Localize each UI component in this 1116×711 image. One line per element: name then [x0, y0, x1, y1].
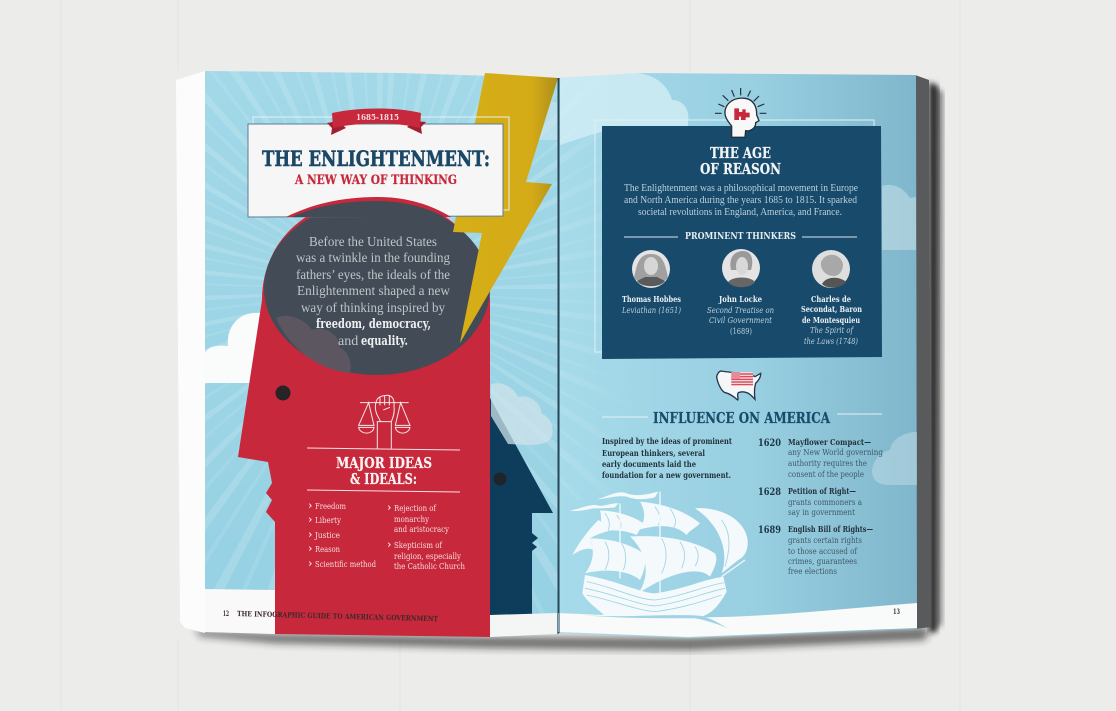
- title card: [248, 124, 503, 217]
- list column one: Justice: [314, 531, 340, 541]
- icon: fist and scales: [359, 395, 410, 449]
- intro paragraph: [296, 235, 451, 349]
- timeline 1620: any New World governing: [788, 447, 884, 457]
- influence intro text: [602, 436, 732, 480]
- thinker: Locke: (1689): [730, 327, 752, 336]
- major ideas heading: MAJOR IDEAS: [336, 455, 432, 472]
- thinker: Hobbes: [621, 294, 681, 315]
- intro paragraph: Enlightenment shaped a new: [297, 284, 451, 299]
- intro paragraph: and: [338, 334, 358, 349]
- timeline 1689: crimes, guarantees: [788, 556, 857, 566]
- thinker: Montesquieu: de Montesquieu: [802, 315, 860, 325]
- lightning bolt: [453, 73, 558, 343]
- portrait: Hobbes: [632, 250, 670, 288]
- panel paragraph: and North America during the years 1685 to 1815. It sparked: [624, 195, 857, 206]
- list column two: ›: [387, 501, 391, 514]
- sunburst rays on right page: [560, 150, 570, 464]
- list column two: Rejection of: [394, 504, 437, 514]
- intro paragraph: fathers’ eyes, the ideals of the: [296, 268, 450, 283]
- title text: THE ENLIGHTENMENT:: [262, 146, 490, 171]
- timeline 1689: grants certain rights: [788, 535, 862, 545]
- shadow head eye: [494, 472, 506, 486]
- white bottom wave: [558, 603, 917, 637]
- timeline 1620: 1620: [758, 438, 781, 449]
- icon: US map with flag: [717, 371, 761, 400]
- list column one: ›: [308, 513, 312, 526]
- thinker: Hobbes: Leviathan (1651): [621, 306, 681, 315]
- subtitle text: A NEW WAY OF THINKING: [294, 173, 457, 188]
- list column one: ›: [308, 557, 312, 570]
- timeline 1628: say in government: [788, 507, 856, 517]
- timeline 1689: 1689: [758, 525, 781, 536]
- cloud: right middle: [882, 185, 916, 250]
- faded cloud in circle: [276, 316, 351, 373]
- intro paragraph: freedom, democracy,: [316, 317, 431, 332]
- list column two: religion, especially: [394, 552, 461, 562]
- panel: the age of reason: [602, 88, 882, 359]
- list column one: Reason: [315, 545, 340, 555]
- list column one: Scientific method: [315, 560, 376, 570]
- list column one: Liberty: [315, 516, 341, 526]
- icon: head with puzzle piece: [715, 88, 766, 137]
- timeline 1689: English Bill of Rights—: [788, 524, 873, 534]
- list column two: ›: [387, 538, 391, 551]
- panel paragraph: [624, 183, 859, 218]
- circle over card: [292, 201, 445, 217]
- left page footer: 12: [223, 609, 229, 618]
- influence intro text: foundation for a new government.: [602, 470, 731, 480]
- left page footer: THE INFOGRAPHIC GUIDE TO AMERICAN GOVERNMENT: [237, 609, 439, 623]
- list column one: ›: [308, 542, 312, 555]
- list column one: Freedom: [315, 502, 346, 512]
- major ideas rule top: [307, 448, 460, 450]
- timeline 1689: [758, 524, 873, 576]
- timeline 1689: free elections: [788, 566, 837, 576]
- cloud: left page white: [205, 313, 262, 383]
- panel heading: OF REASON: [700, 161, 781, 178]
- major ideas heading: [336, 455, 432, 488]
- intro paragraph: way of thinking inspired by: [301, 301, 445, 316]
- portrait: Montesquieu: [812, 250, 850, 288]
- panel outline: [595, 120, 874, 352]
- list column two: the Catholic Church: [394, 562, 465, 572]
- list column two: [387, 501, 465, 572]
- dark thought circle: [264, 201, 490, 375]
- timeline 1628: grants commoners a: [788, 497, 862, 507]
- timeline 1620: authority requires the: [788, 458, 867, 468]
- timeline 1620: [758, 437, 884, 479]
- influence intro text: early documents laid the: [602, 459, 696, 469]
- head rim over card: [286, 197, 451, 217]
- intro paragraph: was a twinkle in the founding: [296, 251, 450, 266]
- timeline 1620: consent of the people: [788, 469, 864, 479]
- list column one: ›: [308, 499, 312, 512]
- white bottom band left: [205, 589, 275, 634]
- influence intro text: European thinkers, several: [602, 448, 705, 458]
- red head eye: [276, 386, 290, 400]
- panel heading: [700, 145, 781, 178]
- thinker: Montesquieu: Secondat, Baron: [801, 304, 862, 314]
- timeline 1628: [758, 486, 862, 517]
- thinker: Montesquieu: The Spirit of: [810, 326, 855, 335]
- influence intro text: Inspired by the ideas of prominent: [602, 436, 732, 446]
- influence on america heading: INFLUENCE ON AMERICA: [653, 409, 830, 427]
- panel paragraph: The Enlightenment was a philosophical movement in Europe: [624, 183, 859, 194]
- right page number: 13: [893, 607, 900, 616]
- major ideas rule bottom: [307, 490, 460, 492]
- illustration: sailing ship: [570, 492, 748, 628]
- timeline 1620: Mayflower Compact—: [788, 437, 871, 447]
- blue shadow head silhouette: [490, 398, 553, 616]
- timeline 1628: Petition of Right—: [788, 486, 856, 496]
- list column one: [308, 499, 376, 570]
- panel heading: THE AGE: [710, 145, 771, 162]
- spine shadow: [558, 78, 560, 633]
- sunburst rays on left page: [205, 72, 558, 614]
- major ideas heading: & IDEALS:: [350, 471, 417, 488]
- prominent thinkers heading: PROMINENT THINKERS: [685, 232, 796, 242]
- cloud: right lower: [872, 432, 917, 485]
- ribbon date: 1685-1815: [356, 113, 399, 123]
- cloud: top left: [560, 73, 688, 145]
- thinker: Locke: Civil Government: [709, 316, 773, 325]
- panel: left page artwork: [205, 73, 558, 637]
- timeline 1628: 1628: [758, 487, 781, 498]
- list column one: ›: [308, 528, 312, 541]
- title outline: [253, 117, 509, 210]
- portrait: Locke: [722, 249, 760, 287]
- thinker: Montesquieu: the Laws (1748): [804, 337, 858, 346]
- thinker: Locke: Second Treatise on: [707, 306, 774, 315]
- cloud: behind shadow head: [491, 383, 553, 445]
- intro paragraph: equality.: [361, 334, 408, 349]
- ribbon: [327, 108, 426, 135]
- timeline 1689: to those accused of: [788, 546, 858, 556]
- white bottom band right: [490, 613, 557, 637]
- cloud: top right of left page: [524, 102, 558, 140]
- thinker: Hobbes: Thomas Hobbes: [622, 294, 681, 304]
- panel: right page artwork: [558, 73, 917, 637]
- intro paragraph: Before the United States: [309, 235, 437, 250]
- red head silhouette: [238, 197, 490, 637]
- spine line left: [557, 78, 559, 634]
- list column two: and aristocracy: [394, 525, 449, 535]
- list column two: Skepticism of: [394, 541, 443, 551]
- panel paragraph: societal revolutions in England, America, and France.: [638, 207, 842, 218]
- thinker: Locke: [707, 294, 774, 336]
- thinker: Locke: John Locke: [718, 294, 762, 304]
- list column two: monarchy: [394, 515, 429, 525]
- thinker: Montesquieu: [801, 294, 862, 346]
- thinker: Montesquieu: Charles de: [811, 294, 851, 304]
